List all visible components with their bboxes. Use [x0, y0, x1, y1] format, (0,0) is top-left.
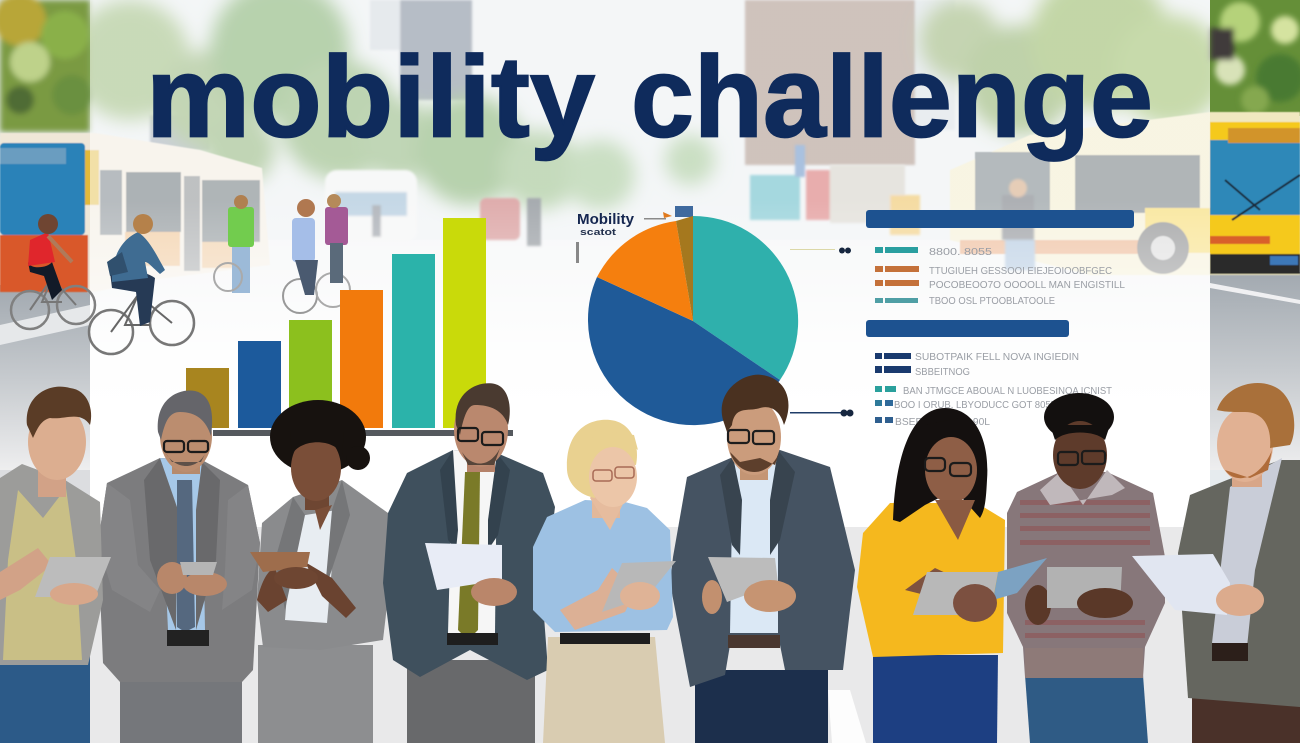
legend panel: lower	[866, 320, 1112, 428]
left ground	[0, 470, 90, 743]
road marking	[828, 690, 866, 743]
person 3: woman with afro and tablet	[250, 400, 388, 743]
person 9: ginger man with paper	[1132, 383, 1300, 743]
legend rows: TBOO OSL PTOOBLATOOLE	[929, 296, 1055, 307]
cyclist: blue jacket	[89, 214, 194, 354]
pie chart label	[576, 212, 672, 263]
right trees	[1210, 0, 1300, 116]
legend header bar	[866, 210, 1134, 228]
panel floor	[0, 527, 1300, 743]
legend rows	[875, 247, 1125, 307]
person 5: blonde woman in blue shirt	[533, 420, 676, 743]
distant traffic	[325, 145, 1035, 270]
pedestrian: purple shirt	[325, 194, 348, 283]
trees	[70, 0, 1225, 210]
cyclists and pedestrians	[11, 194, 350, 354]
pie chart label: scatot	[580, 227, 617, 238]
legend rows: BAN JTMGCE ABOUAL N LUOBESINOA ICNIST	[903, 386, 1112, 397]
right bus	[950, 112, 1300, 275]
pie chart label: Mobility	[577, 212, 634, 228]
legend rows	[875, 352, 1112, 428]
legend rows: POCOBEOO7O OOOOLL MAN ENGISTILL	[929, 280, 1125, 291]
legend rows: SUBOTPAIK FELL NOVA INGIEDIN	[915, 352, 1079, 363]
buildings	[150, 0, 955, 165]
legend rows: SBBEITNOG	[915, 367, 970, 378]
pie chart	[588, 206, 798, 425]
person 1: young man with tablet	[0, 387, 111, 743]
title	[146, 34, 1153, 162]
road	[90, 240, 1210, 470]
bar chart	[186, 218, 513, 436]
legend rows: BOO I ORUB. LBYODUCC GOT 8055	[894, 400, 1056, 411]
cyclist: light shirt	[283, 199, 350, 313]
legend rows: BSER GROUPE 90L	[895, 417, 990, 428]
connector: lower	[790, 410, 854, 416]
person 6: bearded man in dark blazer	[670, 375, 855, 743]
left bus	[0, 133, 270, 292]
connector: upper	[790, 248, 851, 254]
legend header bar	[866, 320, 1069, 337]
person 4: man in dark suit with papers	[383, 383, 555, 743]
pedestrian: green shirt	[214, 195, 254, 293]
person 7: woman in yellow shirt with book	[857, 408, 1005, 743]
person 8: man in striped sweater with tablet	[1007, 393, 1165, 743]
legend rows: TTUGIUEH GESSOOI EIEJEOIOOBFGEC	[929, 266, 1112, 277]
legend panel: upper	[866, 210, 1134, 307]
book held by person 7	[913, 558, 1047, 622]
cyclist: red shirt	[11, 214, 95, 329]
legend rows: 8800. 8055	[929, 247, 993, 258]
title: mobility	[146, 34, 595, 162]
title: challenge	[631, 34, 1153, 162]
person 2: man in grey suit	[98, 390, 260, 743]
